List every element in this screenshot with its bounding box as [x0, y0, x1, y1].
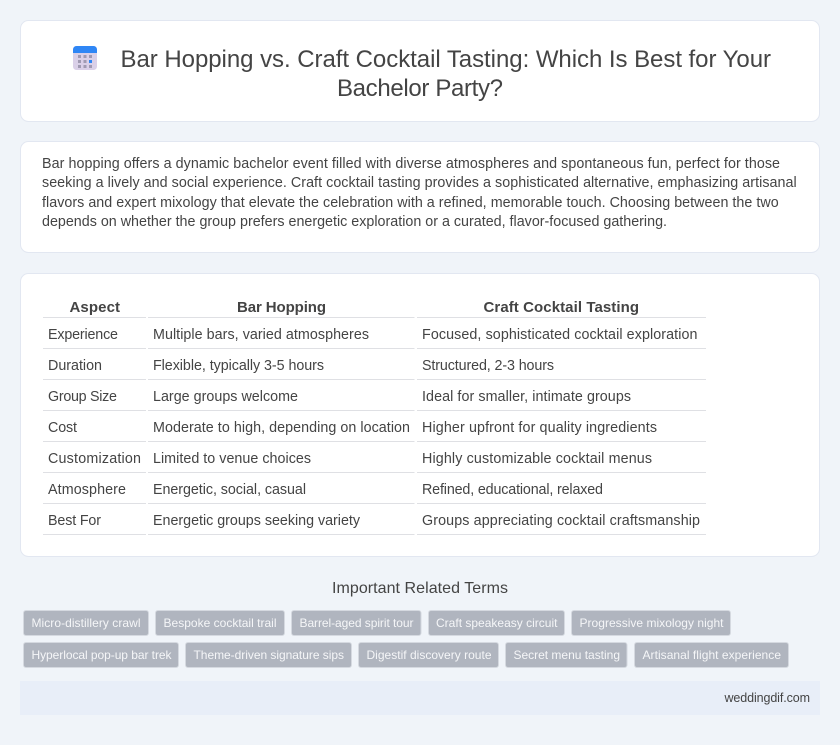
table header row: Bar Hopping [237, 299, 326, 316]
tag [24, 610, 148, 636]
row: best for: Groups appreciating cocktail craftsmanship [422, 513, 700, 529]
row: experience: Experience [48, 327, 118, 343]
tag: Digestif discovery route [366, 648, 492, 662]
row: atmosphere: Atmosphere [48, 482, 126, 498]
row: duration: Duration [48, 358, 102, 374]
row: experience: Focused, sophisticated cocktail exploration [422, 327, 698, 343]
tag [428, 610, 564, 636]
row: customization: Limited to venue choices [153, 451, 311, 467]
panel: comparison table [20, 274, 820, 556]
tag: Craft speakeasy circuit [436, 616, 558, 630]
panel: introduction [20, 142, 820, 252]
tag list: related terms [24, 610, 788, 668]
tag: Progressive mixology night [580, 616, 724, 630]
footer source: weddingdif.com [724, 691, 810, 705]
tag [156, 610, 284, 636]
row: atmosphere [48, 482, 603, 498]
title [120, 46, 771, 102]
row: customization: Highly customizable cocktail menus [422, 451, 652, 467]
tag: Barrel-aged spirit tour [300, 616, 414, 630]
tag [634, 642, 788, 668]
row: cost [48, 420, 657, 436]
row: duration [48, 358, 554, 374]
row: duration: Structured, 2-3 hours [422, 358, 554, 374]
row: cost: Higher upfront for quality ingredients [422, 420, 657, 436]
text block: introduction paragraph: seeking a lively and social experience. Craft cocktail tasting provides a sophisticated alternative, emphasizing artisanal [42, 175, 797, 191]
row: duration: Flexible, typically 3-5 hours [153, 358, 324, 374]
tag: Bespoke cocktail trail [164, 616, 276, 630]
title: Bachelor Party? [337, 75, 503, 102]
tag [572, 610, 730, 636]
tag: Theme-driven signature sips [194, 648, 344, 662]
row: experience: Multiple bars, varied atmospheres [153, 327, 369, 343]
row: best for: Energetic groups seeking variety [153, 513, 361, 529]
table header row [70, 299, 639, 316]
row: best for [48, 513, 700, 529]
tag [358, 642, 498, 668]
tag [292, 610, 421, 636]
table header row: Aspect [70, 299, 120, 316]
row: cost: Cost [48, 420, 77, 436]
table rules [43, 317, 706, 535]
row: group size: Ideal for smaller, intimate groups [422, 389, 631, 405]
row: customization [48, 451, 652, 467]
footer bar [20, 681, 820, 715]
tag: Micro-distillery crawl [32, 616, 140, 630]
tag: Secret menu tasting [514, 648, 620, 662]
text block: introduction paragraph: depends on whether the group prefers energetic exploration or a curated, flavor-focused gathering. [42, 214, 667, 230]
heading: important related terms: Important Related Terms [332, 580, 508, 597]
table header row: Craft Cocktail Tasting [484, 299, 639, 316]
row: atmosphere: Energetic, social, casual [153, 482, 306, 498]
tag: Hyperlocal pop-up bar trek [32, 648, 172, 662]
row: group size: Large groups welcome [153, 389, 298, 405]
tag [186, 642, 352, 668]
tag [506, 642, 627, 668]
row: atmosphere: Refined, educational, relaxed [422, 482, 603, 498]
row: best for: Best For [48, 513, 101, 529]
title: Bar Hopping vs. Craft Cocktail Tasting: Which Is Best for Your [120, 46, 771, 73]
row: group size: Group Size [48, 389, 117, 405]
text block: introduction paragraph: flavors and expert mixology that elevate the celebration with a refined, memorable touch. Choosing between the two [42, 195, 779, 211]
row: customization: Customization [48, 451, 141, 467]
row: group size [48, 389, 631, 405]
row: experience [48, 327, 698, 343]
text block: introduction paragraph [42, 156, 797, 230]
row: cost: Moderate to high, depending on location [153, 420, 410, 436]
tag [24, 642, 178, 668]
tag: Artisanal flight experience [642, 648, 781, 662]
icon: calendar [73, 46, 97, 70]
text block: introduction paragraph: Bar hopping offers a dynamic bachelor event filled with diverse atmospheres and spontaneous fun, perfect for those [42, 156, 780, 172]
panel: header [20, 20, 820, 122]
